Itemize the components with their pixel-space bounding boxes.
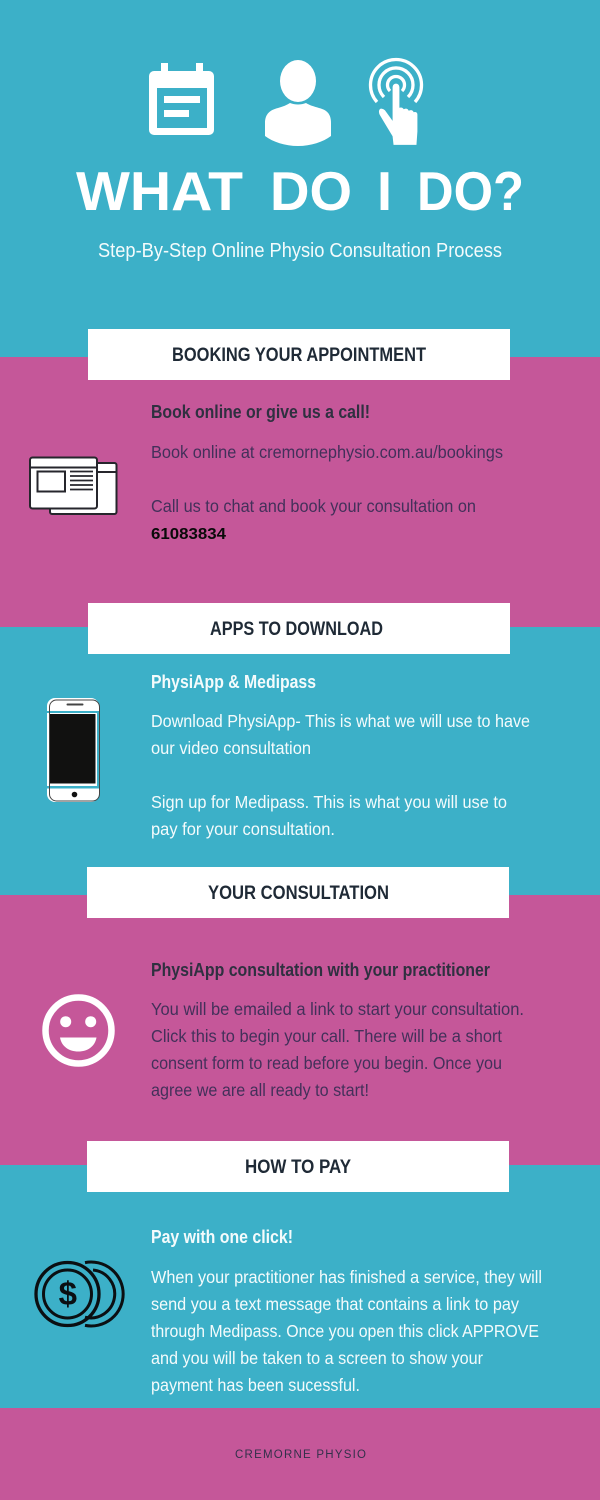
text: payment details: payment has been sucessful. [151, 1375, 360, 1395]
footer text: CREMORNE PHYSIO [235, 1449, 366, 1461]
text: consultation details: consent form to read before you begin. Once you [151, 1053, 502, 1073]
heading: apps: APPS TO DOWNLOAD [210, 618, 383, 640]
text: booking details: Call us to chat and book your consultation on [151, 496, 476, 516]
icon: browser windows [30, 458, 116, 514]
text: payment details: send you a text message that contains a link to pay [151, 1294, 519, 1314]
heading box: pay [87, 1141, 509, 1192]
band: payment background [0, 1165, 600, 1408]
panel: your consultation [46, 867, 524, 1100]
text: payment details: through Medipass. Once you open this click APPROVE [151, 1321, 539, 1341]
text: consultation details: agree we are all ready to start! [151, 1080, 369, 1100]
text: apps details: our video consultation [151, 738, 311, 758]
subheading: physiapp consultation: PhysiApp consultation with your practitioner [151, 959, 490, 980]
text: payment details: and you will be taken to a screen to show your [151, 1348, 483, 1368]
icon: calendar [149, 63, 214, 135]
band: apps background [0, 627, 600, 895]
subheading: pay with one click: Pay with one click! [151, 1226, 293, 1247]
icon: smartphone [47, 698, 100, 802]
band: consultation background [0, 895, 600, 1165]
panel: apps to download [47, 603, 530, 839]
text: consultation details: You will be emailed a link to start your consultation. [151, 999, 524, 1019]
heading box: consultation [87, 867, 509, 918]
subheading: physiapp and medipass: PhysiApp & Medipass [151, 671, 316, 692]
subtitle: Step-By-Step Online Physio Consultation Process [98, 239, 502, 262]
heading: booking: BOOKING YOUR APPOINTMENT [172, 344, 426, 366]
heading box: apps [88, 603, 510, 654]
icon: smiley face [46, 998, 112, 1064]
text: apps details [151, 711, 530, 839]
title: DO? [417, 161, 524, 222]
heading: pay: HOW TO PAY [245, 1156, 351, 1178]
text: apps details: pay for your consultation. [151, 819, 335, 839]
text: phone number: 61083834 [151, 526, 226, 543]
title: DO [270, 161, 352, 222]
band: booking background [0, 357, 600, 627]
icon: tapping hand [370, 59, 421, 145]
icon: coins [36, 1262, 123, 1326]
title: I [377, 161, 392, 222]
icon: person [265, 60, 331, 146]
panel: booking your appointment [30, 329, 510, 543]
band: header background [0, 0, 600, 357]
text: payment details: When your practitioner has finished a service, they will [151, 1267, 542, 1287]
text: apps details: Download PhysiApp- This is what we will use to have [151, 711, 530, 731]
text: booking details: Book online at cremornephysio.com.au/bookings [151, 442, 503, 462]
icon: coins: $ [59, 1275, 77, 1312]
text: consultation details [151, 999, 524, 1100]
title [76, 161, 524, 222]
text: consultation details: Click this to begin your call. There will be a short [151, 1026, 502, 1046]
heading box: booking [88, 329, 510, 380]
text: booking details [151, 442, 503, 516]
heading: consultation: YOUR CONSULTATION [208, 882, 389, 904]
text: payment details [151, 1267, 542, 1395]
panel: how to pay [36, 1141, 542, 1395]
band: footer background [0, 1408, 600, 1500]
text: apps details: Sign up for Medipass. This is what you will use to [151, 792, 507, 812]
subheading: book online: Book online or give us a call! [151, 401, 370, 422]
title: WHAT [76, 161, 243, 222]
